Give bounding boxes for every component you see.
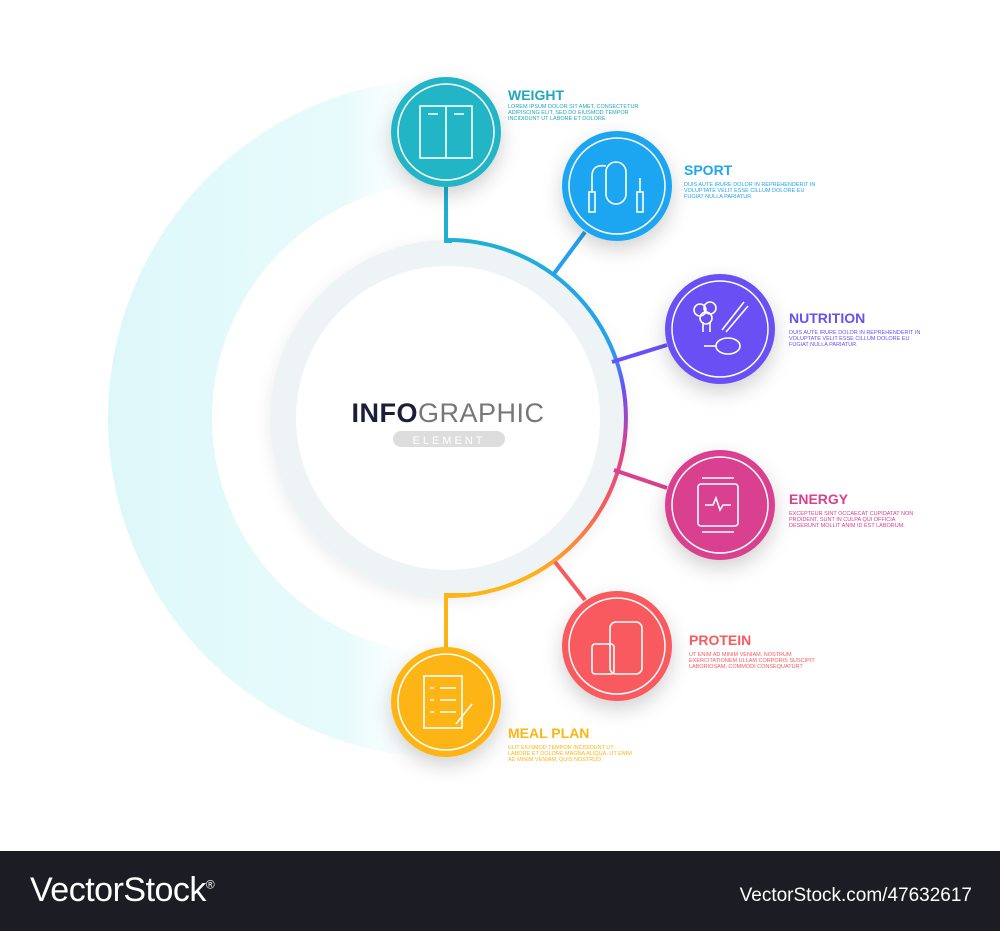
- icon: jars: [592, 622, 642, 674]
- background crescent: [108, 78, 448, 758]
- footer bar: [0, 851, 1000, 931]
- icon: checklist: [424, 676, 472, 728]
- node: meal plan: [391, 647, 501, 757]
- center title: ELEMENT: [413, 435, 485, 447]
- text: weight: WEIGHT: [508, 87, 564, 103]
- icon: scale: [420, 106, 472, 158]
- text: sport: FUGIAT NULLA PARIATUR.: [684, 194, 753, 200]
- text: sport: VOLUPTATE VELIT ESSE CILLUM DOLORE EU: [684, 188, 804, 194]
- center ring: [270, 240, 626, 596]
- text: protein: [689, 632, 815, 670]
- center title: INFOGRAPHIC: [351, 398, 545, 428]
- text: protein: LABORIOSAM, COMMODI CONSEQUATUR?: [689, 664, 803, 670]
- text: nutrition: [789, 310, 920, 348]
- text: protein: PROTEIN: [689, 632, 751, 648]
- footer url: VectorStock.com/47632617: [740, 885, 972, 906]
- text: energy: DESERUNT MOLLIT ANIM ID EST LABORUM.: [789, 523, 905, 529]
- text: sport: DUIS AUTE IRURE DOLOR IN REPREHENDERIT IN: [684, 182, 815, 188]
- text: nutrition: FUGIAT NULLA PARIATUR.: [789, 342, 858, 348]
- text: nutrition: VOLUPTATE VELIT ESSE CILLUM DOLORE EU: [789, 336, 909, 342]
- text: sport: [684, 162, 815, 200]
- text: weight: LOREM IPSUM DOLOR SIT AMET, CONSECTETUR: [508, 104, 638, 110]
- node: nutrition: [665, 274, 775, 384]
- text: protein: EXERCITATIONEM ULLAM CORPORIS SUSCIPIT: [689, 658, 815, 664]
- text: energy: ENERGY: [789, 491, 849, 507]
- node: sport: [562, 131, 672, 241]
- text: meal plan: LABORE ET DOLORE MAGNA ALIQUA. UT ENIM: [508, 751, 632, 757]
- node: energy: [665, 450, 775, 560]
- text: meal plan: AD MINIM VENIAM, QUIS NOSTRUD: [508, 757, 601, 763]
- text: nutrition: NUTRITION: [789, 310, 865, 326]
- text: meal plan: ELIT EIUSMOD TEMPOR INCIDIDUNT UT: [508, 745, 614, 751]
- text: energy: PROIDENT, SUNT IN CULPA QUI OFFICIA: [789, 517, 896, 523]
- text: weight: ADIPISCING ELIT, SED DO EIUSMOD TEMPOR: [508, 110, 629, 116]
- text: weight: [508, 87, 638, 122]
- text: protein: UT ENIM AD MINIM VENIAM, NOSTRUM: [689, 652, 792, 658]
- text: weight: INCIDIDUNT UT LABORE ET DOLORE: [508, 116, 606, 122]
- colored arc: [448, 240, 626, 596]
- icon: food: [694, 302, 748, 354]
- icon: watch: [698, 478, 738, 532]
- text: meal plan: MEAL PLAN: [508, 725, 589, 741]
- footer logo: VectorStock®: [30, 871, 214, 909]
- text: nutrition: DUIS AUTE IRURE DOLOR IN REPREHENDERIT IN: [789, 330, 920, 336]
- connectors: [446, 186, 667, 648]
- node: protein: [562, 591, 672, 701]
- text: sport: SPORT: [684, 162, 733, 178]
- node: weight: [391, 77, 501, 187]
- text: meal plan: [508, 725, 632, 763]
- text: energy: [789, 491, 913, 529]
- text: energy: EXCEPTEUR SINT OCCAECAT CUPIDATAT NON: [789, 511, 913, 517]
- icon: rope: [589, 162, 643, 212]
- center title: [351, 398, 545, 447]
